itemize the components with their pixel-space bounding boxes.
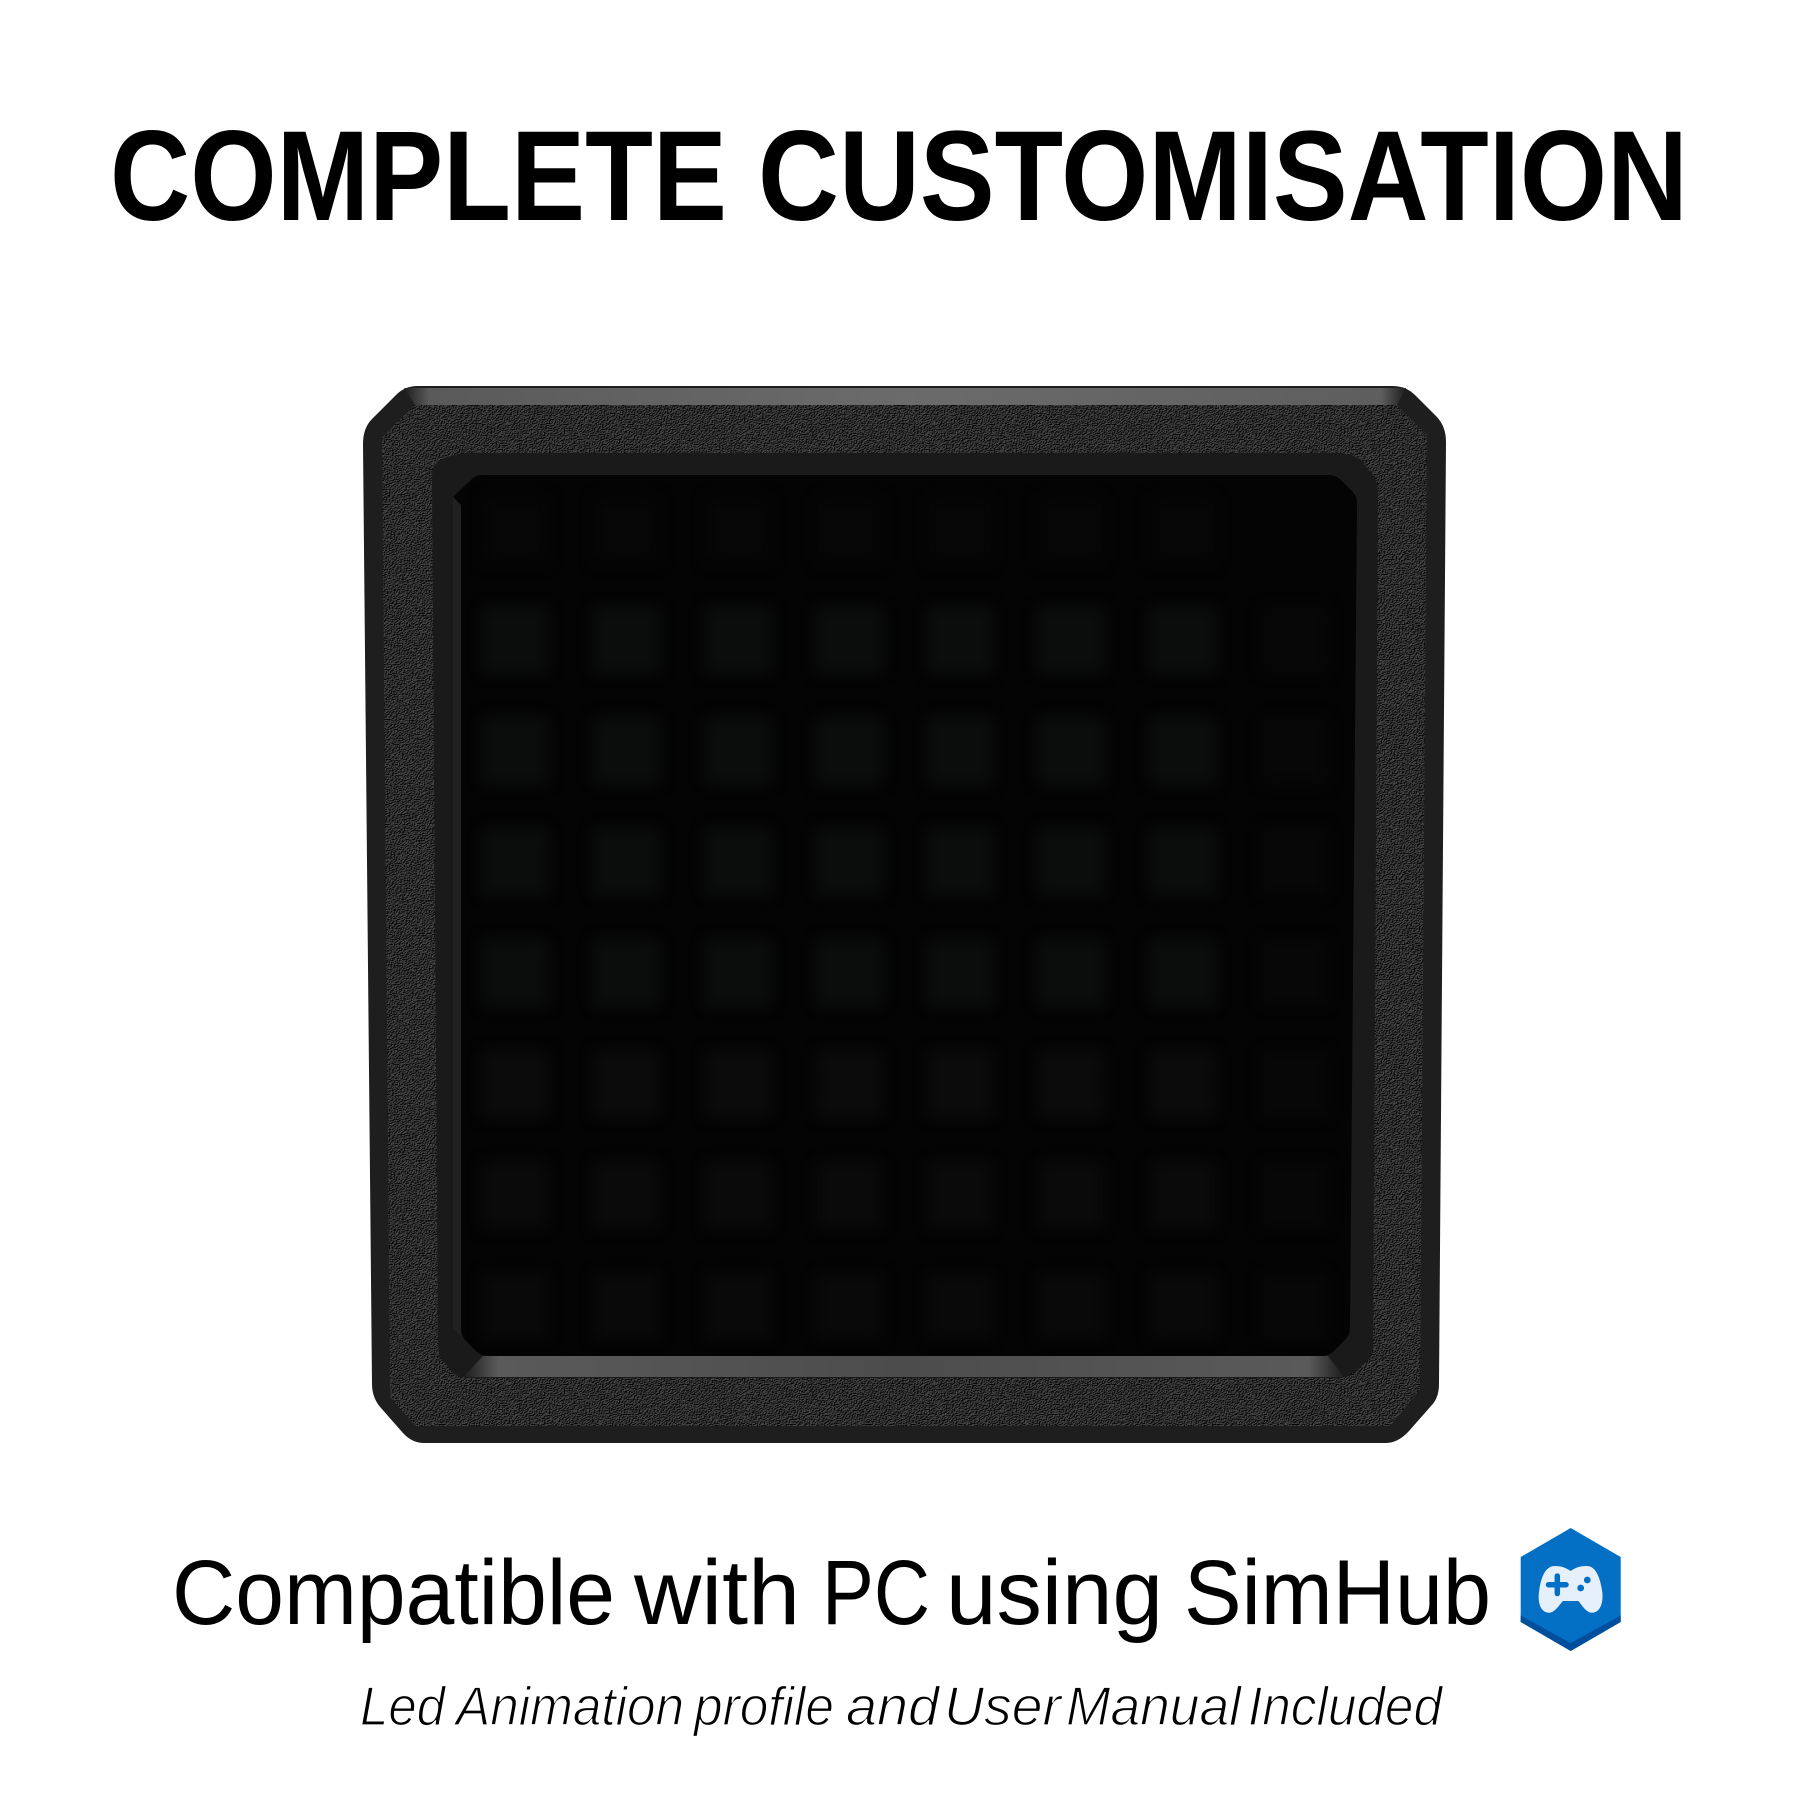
title	[110, 105, 1688, 248]
compatibility line: SimHub	[1184, 1542, 1491, 1644]
subtitle: and	[846, 1675, 941, 1737]
recessed inner frame	[432, 453, 1378, 1378]
bottom inner bevel	[463, 1356, 1344, 1377]
infographic canvas	[114, 130, 1680, 1736]
title: CUSTOMISATION	[758, 105, 1688, 248]
subtitle: profile	[692, 1675, 834, 1737]
subtitle: Manual	[1066, 1675, 1243, 1737]
compatibility line: using	[946, 1542, 1163, 1644]
top bevel highlight	[404, 388, 1406, 405]
icon: SimHub gamepad hexagon	[1521, 1528, 1621, 1651]
device: LED matrix panel	[363, 386, 1446, 1443]
subtitle: Included	[1248, 1675, 1444, 1737]
left inner bevel strip	[453, 497, 461, 1336]
compatibility line: PC	[822, 1542, 930, 1644]
subtitle: Led	[360, 1675, 447, 1737]
title: COMPLETE	[110, 105, 727, 248]
subtitle	[360, 1675, 1444, 1737]
LED screen	[450, 470, 1360, 1360]
LED grid	[494, 618, 1204, 994]
outer housing	[363, 386, 1446, 1443]
compatibility line: with	[633, 1542, 800, 1644]
textured faceplate	[382, 405, 1427, 1426]
subtitle: User	[944, 1675, 1064, 1737]
compatibility line: Compatible	[172, 1542, 615, 1644]
subtitle: Animation	[453, 1675, 684, 1737]
compatibility line	[172, 1542, 1491, 1644]
